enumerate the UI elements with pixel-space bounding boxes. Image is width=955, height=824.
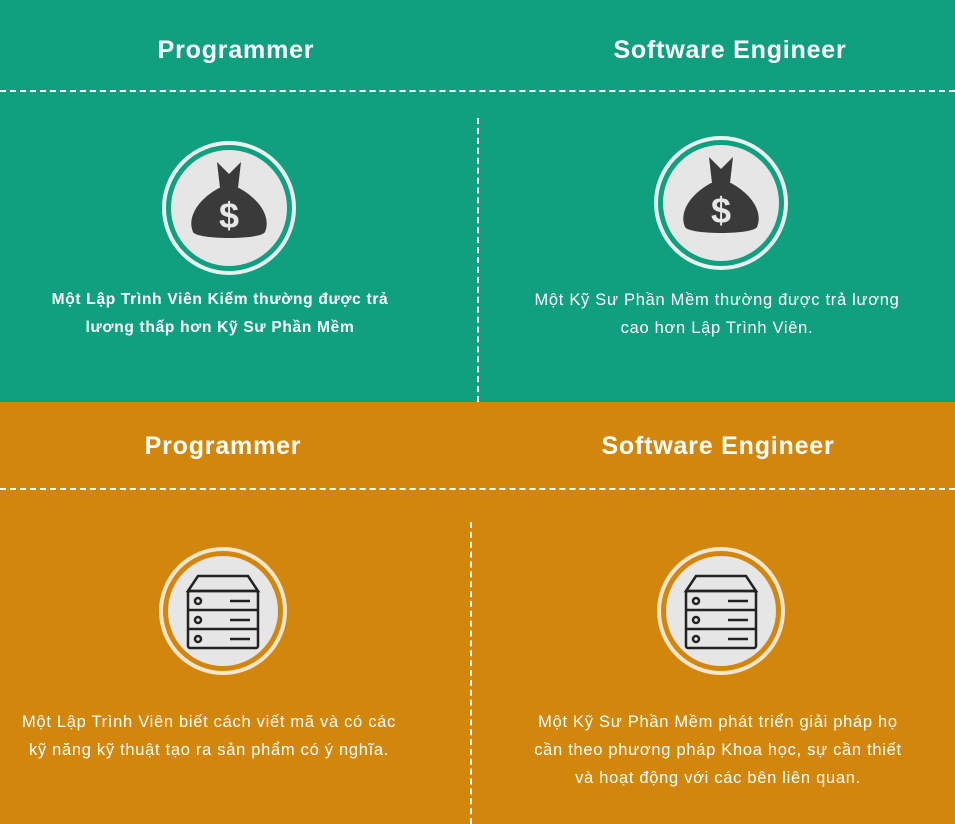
heading: programmer: Programmer — [158, 36, 314, 64]
icon: server left — [159, 547, 287, 675]
text: engineer skills: Một Kỹ Sư Phần Mềm phát triển giải pháp họ — [538, 713, 898, 731]
text: engineer salary — [534, 291, 900, 337]
heading: software engineer: Software Engineer — [613, 36, 847, 64]
icon: money bag right — [654, 136, 788, 270]
panel: skills — [0, 402, 955, 824]
icon: money bag left: $ — [219, 195, 239, 236]
heading: programmer 2: Programmer — [145, 432, 301, 460]
panel: salary — [0, 0, 955, 402]
heading: software engineer 2: Software Engineer — [601, 432, 835, 460]
text: programmer skills: Một Lập Trình Viên biết cách viết mã và có các — [22, 713, 396, 731]
icon: money bag left — [162, 141, 296, 275]
text: engineer skills: và hoạt động với các bên liên quan. — [575, 769, 861, 787]
text: engineer salary: Một Kỹ Sư Phần Mềm thường được trả lương — [534, 291, 900, 309]
text: programmer salary — [52, 291, 388, 336]
text: engineer salary: cao hơn Lập Trình Viên. — [621, 319, 813, 337]
icon: money bag right: $ — [711, 190, 731, 231]
text: programmer skills: kỹ năng kỹ thuật tạo ra sản phẩm có ý nghĩa. — [29, 741, 389, 759]
text: engineer skills — [534, 713, 902, 787]
text: engineer skills: cần theo phương pháp Khoa học, sự cần thiết — [534, 741, 902, 759]
text: programmer salary: lương thấp hơn Kỹ Sư Phần Mềm — [86, 319, 354, 336]
text: programmer salary: Một Lập Trình Viên Kiếm thường được trả — [52, 291, 388, 308]
icon: server right — [657, 547, 785, 675]
text: programmer skills — [22, 713, 396, 759]
